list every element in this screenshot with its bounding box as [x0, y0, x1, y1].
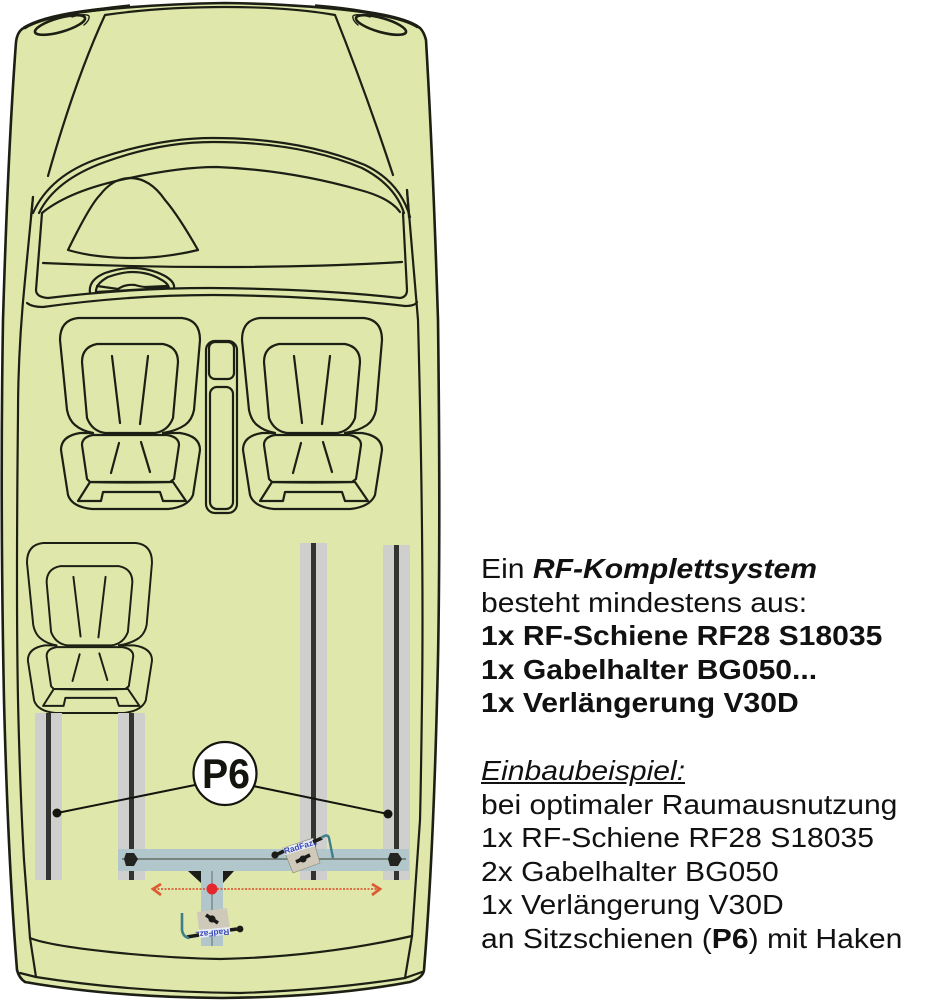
centre console — [206, 341, 237, 513]
windshield — [33, 138, 410, 217]
text: RF-Komplettsystem summary: 1x Verlängerung V30D — [481, 687, 799, 718]
front right seat — [242, 318, 382, 509]
front left seat — [60, 318, 200, 509]
car body — [2, 3, 439, 998]
seat rails — [35, 543, 410, 880]
text: installation example: bei optimaler Raumausnutzung — [481, 789, 897, 820]
text: installation example: 1x RF-Schiene RF28 S18035 — [481, 822, 874, 853]
text: RF-Komplettsystem summary: Ein RF-Komplettsystem — [481, 553, 817, 584]
text: RF-Komplettsystem summary — [481, 553, 882, 718]
text: installation example: Einbaubeispiel: — [481, 755, 685, 786]
text: installation example: 1x Verlängerung V30D — [481, 889, 784, 920]
cross rail RF-Schiene — [118, 849, 409, 946]
P6 callout — [52, 742, 392, 818]
adjustment arrow — [153, 884, 380, 895]
steering wheel — [90, 268, 174, 293]
text: RF-Komplettsystem summary: besteht mindestens aus: — [481, 587, 807, 618]
text: installation example: 2x Gabelhalter BG050 — [481, 856, 779, 887]
lower fork holder — [182, 908, 243, 940]
lower fork holder: RadFazz — [195, 927, 230, 940]
rail knobs — [124, 853, 402, 866]
text: RF-Komplettsystem summary: 1x RF-Schiene RF28 S18035 — [481, 620, 882, 651]
rear seat — [27, 543, 152, 713]
text: installation example: an Sitzschienen (P6) mit Haken — [481, 923, 902, 954]
upper fork holder: RadFazz — [283, 836, 318, 856]
dashboard — [27, 178, 417, 307]
headlights — [33, 11, 408, 39]
text: installation example — [481, 755, 902, 954]
P6 callout: P6 — [202, 750, 250, 797]
text: RF-Komplettsystem summary: 1x Gabelhalter BG050... — [481, 654, 817, 685]
upper fork holder — [271, 836, 333, 873]
hood — [48, 7, 393, 176]
